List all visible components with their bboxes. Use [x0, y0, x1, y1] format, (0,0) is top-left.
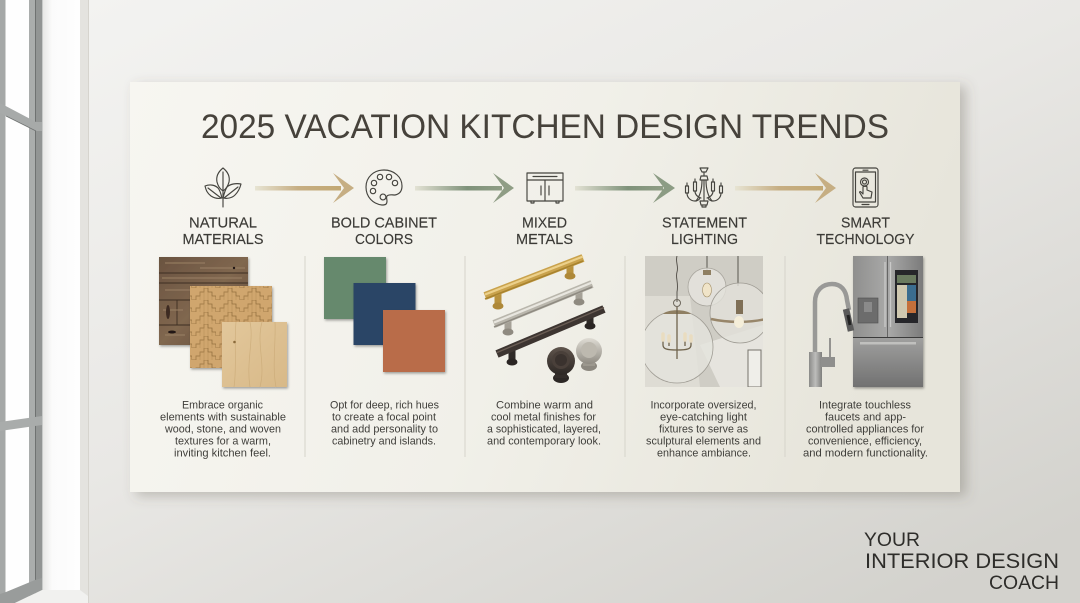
logo: your interior design coach: INTERIOR DESIGN [865, 550, 1059, 573]
top globe [688, 268, 726, 306]
heading: mixed metals: METALS [516, 231, 573, 248]
dark knob [547, 347, 575, 383]
heading: smart technology: TECHNOLOGY [816, 231, 914, 248]
large globe [641, 300, 713, 383]
heading: natural materials: MATERIALS [182, 231, 264, 248]
text: bold cabinet colors [330, 400, 439, 448]
text: statement lighting: eye-catching light [660, 412, 747, 424]
arrow: tan 2 [735, 173, 836, 203]
heading: natural materials: NATURAL [189, 214, 257, 232]
image: mixed metal handles and knobs [485, 256, 604, 383]
dark pull [497, 308, 604, 366]
text: bold cabinet colors: cabinetry and islands. [332, 436, 436, 448]
faucet [809, 284, 851, 387]
heading: mixed metals: MIXED [522, 214, 567, 232]
window with frame and reveal [0, 0, 89, 603]
text: smart technology: Integrate touchless [819, 400, 911, 412]
text: bold cabinet colors: and add personality to [331, 424, 438, 436]
text: mixed metals: Combine warm and [496, 400, 593, 412]
title: 2025 VACATION KITCHEN DESIGN TRENDS [201, 108, 889, 146]
right globe [710, 283, 770, 343]
image: faucet and smart refrigerator [809, 256, 923, 387]
text: statement lighting [646, 400, 761, 460]
icon: cabinet [527, 173, 563, 203]
headings [182, 214, 914, 248]
text: mixed metals: cool metal finishes for [491, 412, 596, 424]
text: mixed metals: a sophisticated, layered, [487, 424, 601, 436]
image: cabinet colour swatches [324, 257, 445, 372]
panel: display board [130, 82, 960, 492]
text: bold cabinet colors: Opt for deep, rich hues [330, 400, 439, 412]
heading: bold cabinet colors [331, 214, 437, 248]
text: natural materials: wood, stone, and woven [164, 424, 281, 436]
arrow: green 2 [575, 173, 675, 203]
text: statement lighting: sculptural elements and [646, 436, 761, 448]
refrigerator [853, 256, 923, 387]
logo: your interior design coach: COACH [989, 573, 1059, 594]
logo: your interior design coach: YOUR [864, 530, 920, 551]
text: smart technology [803, 400, 928, 460]
gold pull [485, 256, 583, 310]
heading: bold cabinet colors: BOLD CABINET [331, 214, 437, 232]
arrow: tan 1 [255, 173, 354, 203]
icon: chandelier [686, 168, 722, 207]
text: statement lighting: Incorporate oversized, [650, 400, 756, 412]
text: natural materials: elements with sustainable [160, 412, 286, 424]
text: natural materials: textures for a warm, [175, 436, 271, 448]
silver pull [494, 282, 592, 336]
arrow: green 1 [415, 173, 514, 203]
icon: paint palette [366, 170, 402, 205]
text: statement lighting: fixtures to serve as [659, 424, 748, 436]
text: natural materials: Embrace organic [182, 400, 264, 412]
heading: natural materials [182, 214, 264, 248]
icon: smart tablet with touch [853, 168, 878, 207]
text: natural materials: inviting kitchen feel. [174, 448, 271, 460]
heading: mixed metals [516, 214, 573, 248]
image: wood material samples [159, 257, 287, 387]
text: smart technology: and modern functionality. [803, 448, 928, 460]
heading: statement lighting: STATEMENT [662, 214, 747, 232]
text: smart technology: faucets and app- [825, 412, 906, 424]
logo: your interior design coach [864, 530, 1059, 594]
text: statement lighting: enhance ambiance. [657, 448, 751, 460]
heading: bold cabinet colors: COLORS [355, 231, 413, 248]
text: bold cabinet colors: to create a focal point [332, 412, 436, 424]
text: smart technology: convenience, efficiency, [808, 436, 922, 448]
heading: smart technology [816, 214, 914, 248]
icon: leaf sprig [205, 168, 241, 207]
heading: statement lighting: LIGHTING [671, 231, 738, 248]
text: mixed metals: and contemporary look. [487, 436, 601, 448]
silver knob [576, 338, 602, 371]
image: pendant lights [641, 256, 770, 387]
text: natural materials [160, 400, 286, 460]
heading: statement lighting [662, 214, 747, 248]
description columns [160, 400, 928, 460]
text: smart technology: controlled appliances for [806, 424, 924, 436]
heading: smart technology: SMART [841, 214, 890, 232]
text: mixed metals [487, 400, 601, 448]
